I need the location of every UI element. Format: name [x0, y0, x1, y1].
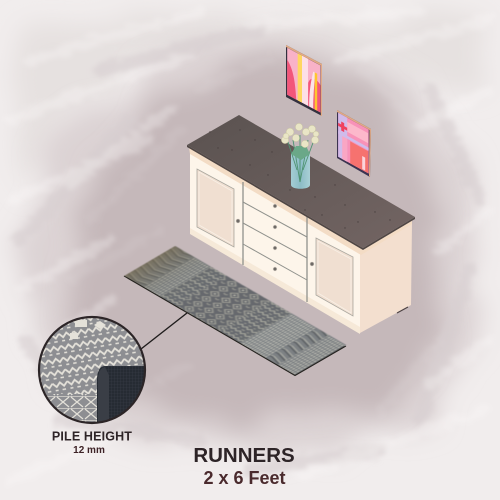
left door — [197, 169, 240, 247]
detail circle: rug pile close-up — [39, 317, 145, 424]
rug backing corner — [97, 366, 145, 423]
cabinet countertop — [187, 115, 415, 250]
pile height label — [52, 430, 132, 456]
right door — [310, 238, 353, 316]
pile height label: 12 mm — [73, 445, 105, 456]
title: 2 x 6 Feet — [203, 468, 286, 488]
title — [193, 444, 295, 488]
pile height label: PILE HEIGHT — [52, 430, 132, 444]
vase glass — [291, 154, 310, 189]
drawers — [243, 182, 307, 302]
stems — [288, 135, 314, 182]
cabinet side panel — [360, 222, 412, 333]
wall picture: left poster — [286, 45, 322, 116]
cabinet foot — [397, 307, 408, 313]
wall picture: right poster — [337, 110, 371, 177]
flower vase — [281, 123, 319, 189]
sideboard cabinet — [187, 115, 415, 334]
cabinet front — [190, 150, 360, 333]
leader line from rug to detail circle — [141, 313, 187, 349]
runner rug — [124, 246, 346, 376]
title: RUNNERS — [193, 444, 295, 467]
blooms — [281, 123, 319, 148]
